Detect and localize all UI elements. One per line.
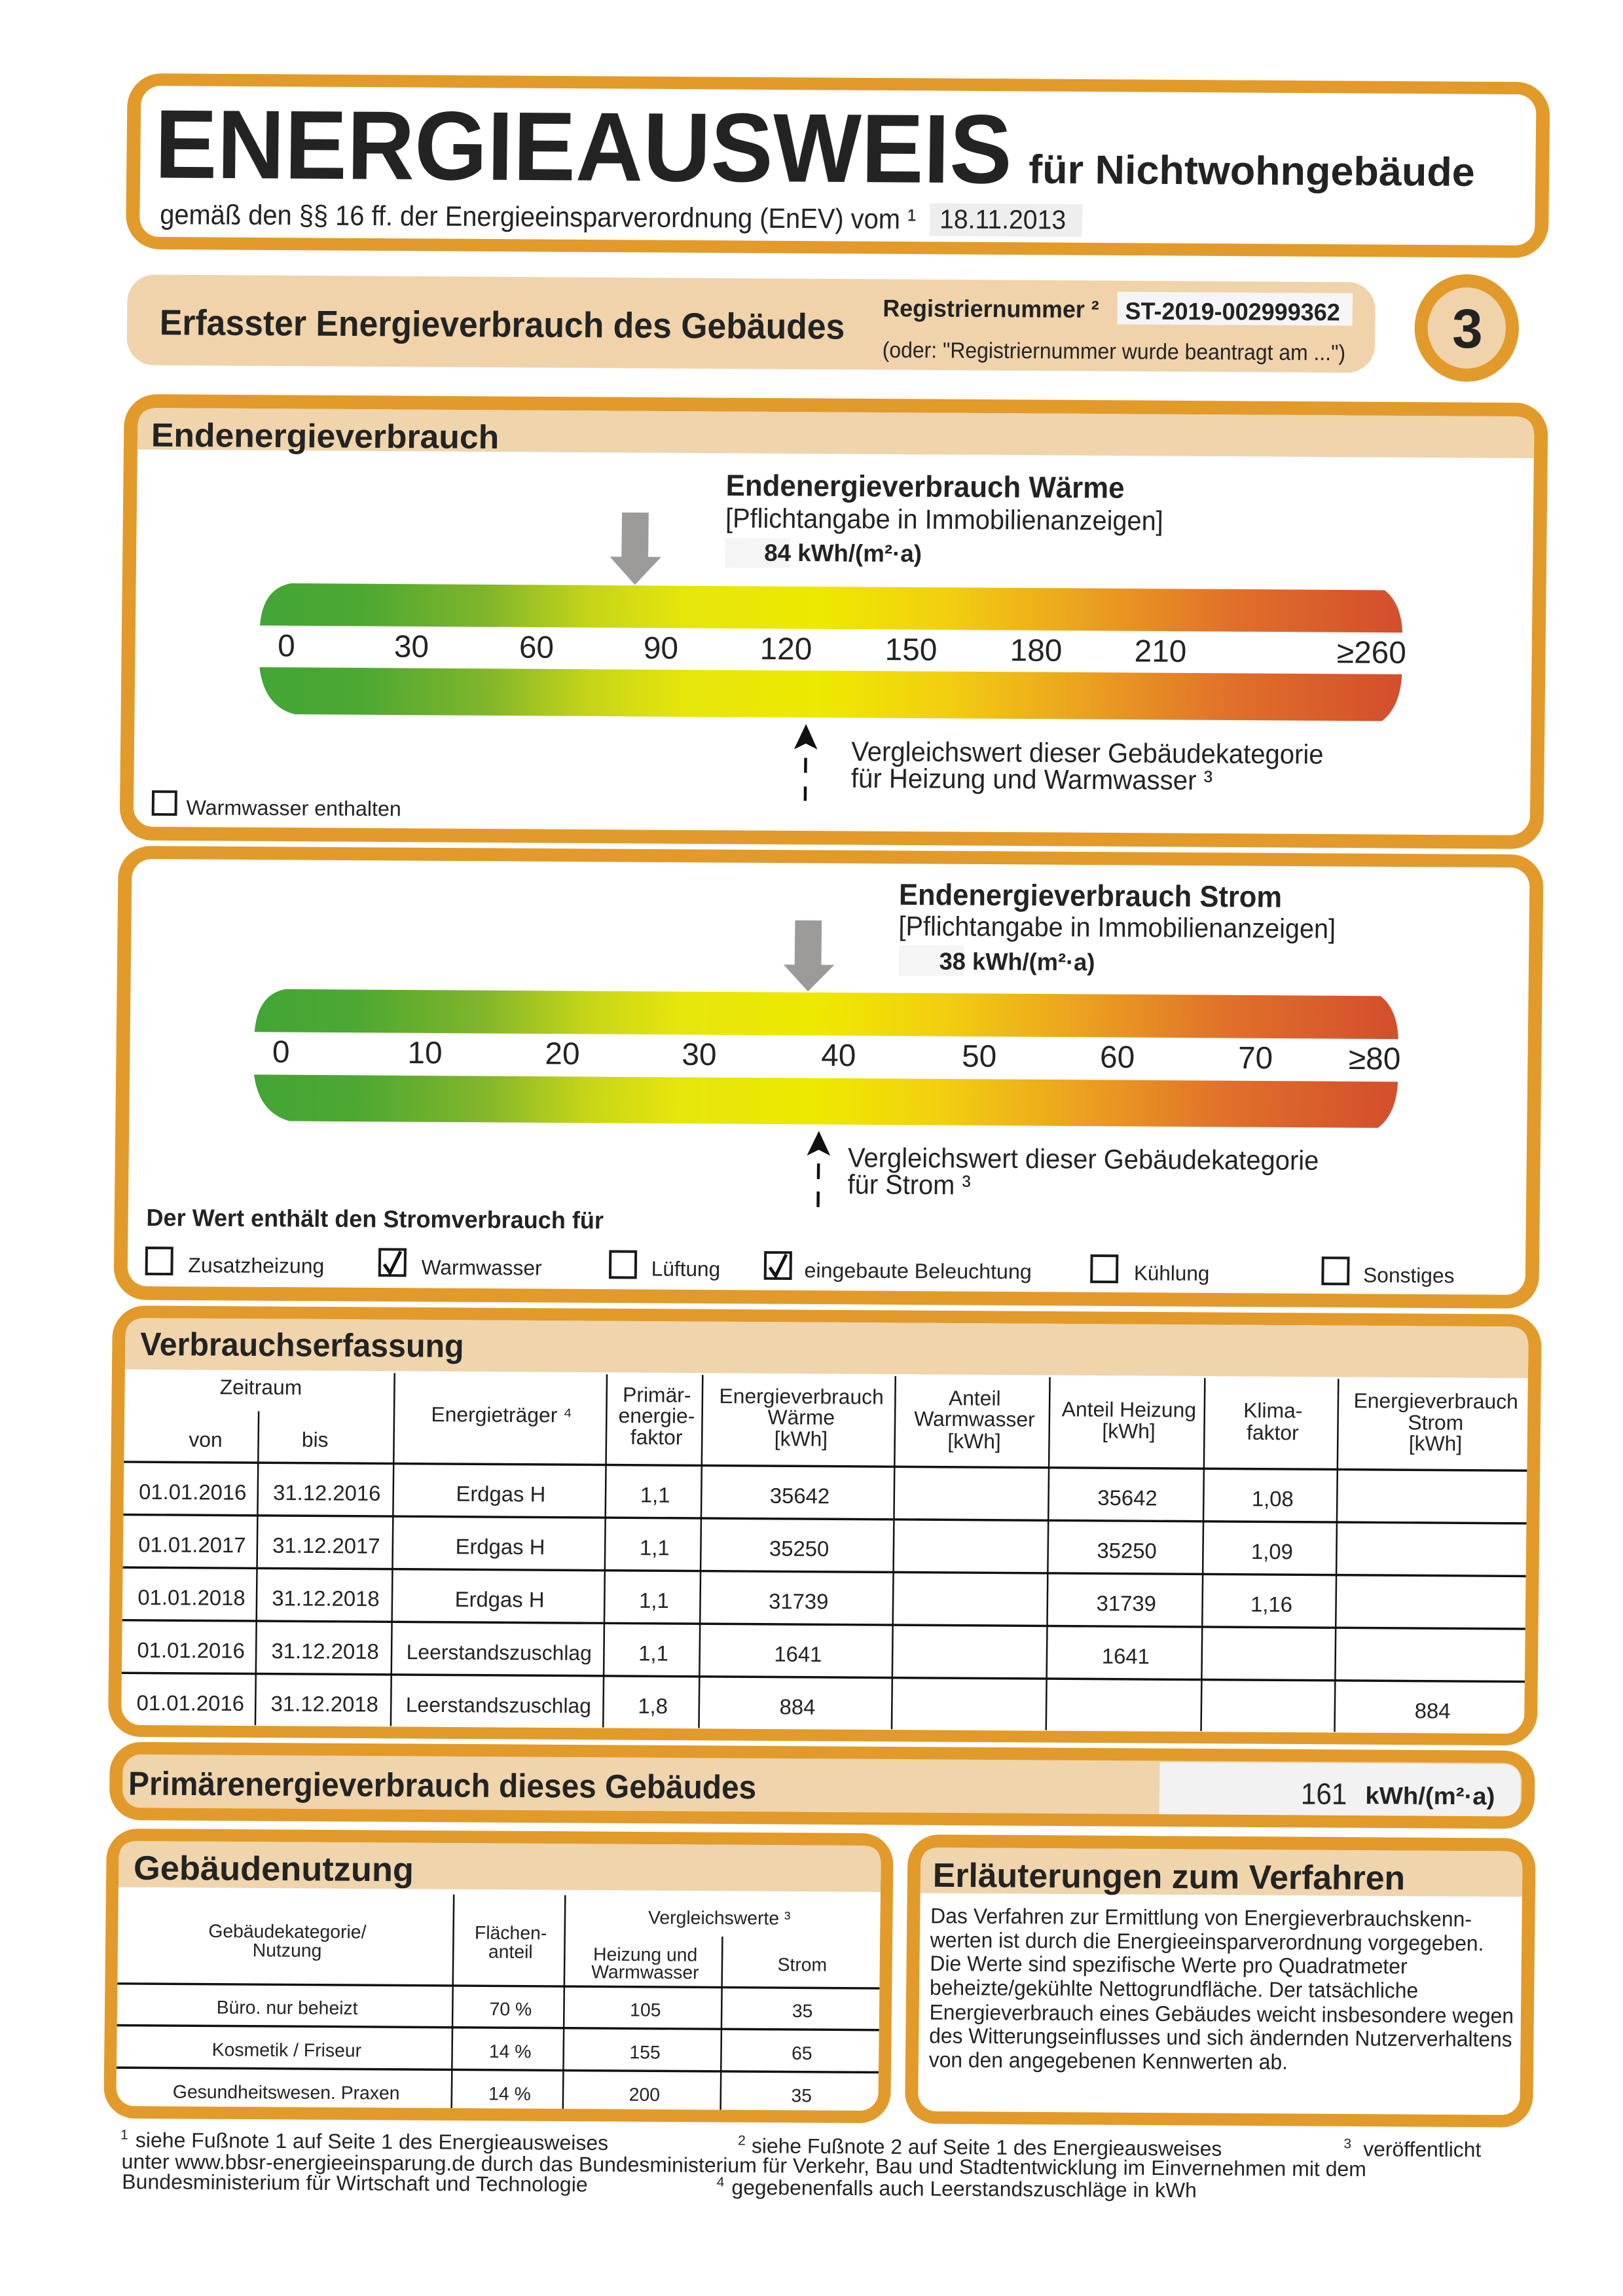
panel: Endenergieverbrauch Wärme [119, 394, 1548, 849]
heading: Gebäudenutzung: Gebäudenutzung [134, 1849, 414, 1888]
row 2017 [138, 1532, 1293, 1563]
explanation paragraph: des Witterungseinflusses und sich ändernden Nutzerverhaltens [929, 2023, 1512, 2051]
explanation paragraph: beheizte/gekühlte Nettogrundfläche. Der tatsächliche [930, 1975, 1418, 2003]
table header: Klima- [1243, 1398, 1303, 1423]
row 2018: 1,1 [639, 1588, 669, 1613]
scale values: 50 [962, 1039, 997, 1074]
table header: [kWh] [947, 1429, 1001, 1453]
row 2017: 35250 [769, 1536, 830, 1561]
scale values: 60 [1100, 1040, 1135, 1075]
table header: Warmwasser [591, 1961, 699, 1983]
arrow: measured value marker [783, 920, 835, 992]
row 2016: 1,08 [1252, 1486, 1294, 1511]
footnotes: siehe Fußnote 1 auf Seite 1 des Energieausweises [136, 2128, 608, 2155]
checkbox: Warmwasser enthalten [153, 792, 176, 814]
registration number field background [1117, 292, 1353, 326]
row Leerstandszuschlag heat [137, 1638, 1150, 1668]
table header: Heizung und [593, 1944, 697, 1966]
scale values: 150 [884, 632, 938, 668]
table header: Energieträger ⁴ [431, 1402, 572, 1427]
row Leerstandszuschlag electricity [136, 1690, 1451, 1723]
panel: section title bar [126, 274, 1376, 373]
row 2016 [139, 1480, 1294, 1511]
value field background [899, 945, 964, 976]
row Gesundheitswesen: 14 % [488, 2083, 531, 2105]
checkbox: eingebaute Beleuchtung (checked) [765, 1252, 1032, 1283]
date field background [930, 204, 1082, 237]
table header: Strom [1408, 1410, 1463, 1434]
date value: 18.11.2013 [939, 204, 1066, 235]
scale values: ≥80 [1349, 1042, 1401, 1076]
row 2017: 01.01.2017 [138, 1532, 246, 1557]
row 2018: Erdgas H [455, 1587, 545, 1612]
scale values [278, 629, 1406, 670]
row 2017: 31.12.2017 [272, 1533, 380, 1558]
table header: Primär- [623, 1383, 691, 1407]
consumption table [121, 1372, 1528, 1733]
panel: Endenergieverbrauch Strom [113, 846, 1544, 1309]
row Gesundheitswesen: Gesundheitswesen. Praxen [173, 2081, 400, 2104]
value field background [1159, 1762, 1521, 1817]
upper colour scale bar [255, 989, 1399, 1039]
table header: Wärme [767, 1405, 835, 1429]
row Leerstandszuschlag heat: 1641 [1102, 1644, 1150, 1668]
row Büro: Büro. nur beheizt [217, 1997, 358, 2019]
checkbox group heading: Der Wert enthält den Stromverbrauch für [146, 1204, 604, 1234]
row 2017: Erdgas H [455, 1534, 545, 1559]
explanation paragraph: Das Verfahren zur Ermittlung von Energieverbrauchskenn- [930, 1903, 1472, 1931]
row 2018: 31739 [769, 1589, 829, 1614]
panel: Erläuterungen zum Verfahren [905, 1834, 1536, 2128]
upper colour scale bar [260, 583, 1403, 632]
row 2018 [137, 1585, 1292, 1616]
scale values: 0 [278, 629, 295, 664]
checkbox: Lüftung: Lüftung [651, 1257, 720, 1281]
scale values [272, 1035, 1401, 1076]
row Leerstandszuschlag heat: 01.01.2016 [137, 1638, 245, 1663]
checkbox: Warmwasser (checked) [380, 1249, 542, 1280]
registration number hint: (oder: "Registriernummer wurde beantragt am ...") [883, 338, 1345, 365]
comparison value caption: Vergleichswert dieser Gebäudekategorie [848, 1142, 1319, 1176]
comparison value caption line two: für Heizung und Warmwasser ³ [851, 763, 1213, 795]
table header: faktor [630, 1425, 683, 1449]
table header: Gebäudekategorie/ [208, 1921, 367, 1943]
panel: Primärenergieverbrauch [109, 1742, 1535, 1829]
scale values: 40 [821, 1038, 856, 1073]
row Leerstandszuschlag electricity: Leerstandszuschlag [406, 1693, 591, 1717]
scale values: 60 [519, 630, 554, 665]
scale values: 90 [644, 631, 678, 666]
footnotes: siehe Fußnote 2 auf Seite 1 des Energieausweises [752, 2134, 1222, 2160]
table header: Strom [777, 1954, 827, 1976]
row Kosmetik: 14 % [489, 2041, 532, 2062]
explanation paragraph: Energieverbrauch eines Gebäudes weicht insbesondere wegen [929, 2000, 1514, 2028]
row Kosmetik: 155 [629, 2042, 661, 2063]
row 2016: Erdgas H [456, 1482, 546, 1506]
scale values: ≥260 [1337, 635, 1406, 670]
row 2017: 1,1 [640, 1535, 670, 1559]
row Leerstandszuschlag heat: 1641 [774, 1642, 822, 1666]
row 2018: 1,16 [1250, 1592, 1292, 1616]
row Büro: 105 [630, 1999, 661, 2021]
heading: Erfasster Energieverbrauch des Gebäudes: Erfasster Energieverbrauch des Gebäudes [159, 302, 845, 347]
row Kosmetik [212, 2039, 812, 2064]
row 2016: 01.01.2016 [139, 1480, 247, 1504]
checkbox: Kühlung: Kühlung [1134, 1261, 1210, 1285]
explanation paragraph: werten ist durch die Energieeinsparverordnung vorgegeben. [930, 1927, 1484, 1956]
arrow: comparison value marker [807, 1131, 831, 1207]
primary energy value: 161 [1301, 1777, 1347, 1811]
footnotes: veröffentlicht [1363, 2137, 1482, 2161]
checkbox: Kühlung [1091, 1256, 1210, 1285]
comparison value caption: Vergleichswert dieser Gebäudekategorie [851, 736, 1324, 770]
mandatory note: [Pflichtangabe in Immobilienanzeigen] [898, 911, 1336, 944]
lower colour scale bar [253, 1074, 1398, 1128]
checkbox: Lüftung [610, 1251, 721, 1281]
footnotes: 2 [738, 2133, 746, 2148]
mandatory note: [Pflichtangabe in Immobilienanzeigen] [725, 503, 1163, 536]
table header: Warmwasser [914, 1407, 1035, 1431]
row Leerstandszuschlag heat: 31.12.2018 [271, 1639, 379, 1664]
explanation paragraph: Die Werte sind spezifische Werte pro Quadratmeter [930, 1951, 1408, 1978]
row Büro: 70 % [489, 1999, 532, 2020]
table header: Nutzung [253, 1940, 322, 1961]
row 2016: 31.12.2016 [273, 1480, 381, 1505]
checkbox label: Warmwasser enthalten [186, 795, 401, 820]
scale values: 20 [545, 1036, 580, 1072]
comparison value caption line two: für Strom ³ [847, 1169, 971, 1200]
row Büro: 35 [792, 2001, 813, 2022]
row Leerstandszuschlag heat: 1,1 [638, 1641, 668, 1666]
table header: Zeitraum [220, 1375, 302, 1399]
footnotes: 1 [120, 2127, 128, 2143]
footnotes: 4 [717, 2175, 724, 2190]
row 2017: 35250 [1097, 1538, 1157, 1563]
row 2018: 31.12.2018 [272, 1586, 380, 1611]
row 2016: 35642 [770, 1484, 830, 1508]
table header [189, 1375, 1518, 1459]
scale values: 120 [759, 632, 812, 666]
row Leerstandszuschlag electricity: 884 [1414, 1698, 1451, 1723]
page number badge [1421, 281, 1512, 375]
table header: Anteil [949, 1386, 1001, 1410]
checkbox: Zusatzheizung [147, 1248, 325, 1278]
scale values: 70 [1238, 1041, 1273, 1076]
table header: Vergleichswerte ³ [648, 1907, 791, 1929]
electricity consumption title: Endenergieverbrauch Strom [899, 878, 1282, 914]
registration number value: ST-2019-002999362 [1125, 297, 1340, 326]
footnotes: 3 [1343, 2136, 1351, 2151]
table header [208, 1904, 828, 1984]
value field background [725, 538, 790, 568]
arrow: comparison value marker [793, 724, 818, 801]
checkbox: Warmwasser (checked): Warmwasser [421, 1255, 542, 1280]
checkbox: Zusatzheizung: Zusatzheizung [188, 1253, 325, 1278]
page number badge: 3 [1452, 298, 1483, 359]
row 2017: 1,09 [1251, 1539, 1293, 1563]
row Kosmetik: Kosmetik / Friseur [212, 2039, 361, 2062]
row Gesundheitswesen: 35 [791, 2085, 812, 2107]
table header: Energieverbrauch [719, 1384, 884, 1409]
table header: Energieverbrauch [1353, 1389, 1518, 1413]
row Leerstandszuschlag electricity: 884 [779, 1694, 816, 1719]
row 2018: 01.01.2018 [137, 1585, 246, 1610]
heat value: 84 kWh/(m²·a) [764, 539, 922, 567]
panel: Verbrauchserfassung [108, 1305, 1542, 1745]
table header: Anteil Heizung [1062, 1397, 1196, 1422]
subtitle: für Nichtwohngebäude: für Nichtwohngebäude [1029, 147, 1475, 195]
footnotes: Bundesministerium für Wirtschaft und Technologie [122, 2170, 588, 2196]
title: ENERGIEAUSWEIS: ENERGIEAUSWEIS [155, 89, 1013, 204]
heat consumption title: Endenergieverbrauch Wärme [725, 469, 1125, 505]
heading: Erläuterungen zum Verfahren: Erläuterungen zum Verfahren [933, 1856, 1405, 1897]
scale values: 30 [394, 629, 429, 665]
row Leerstandszuschlag electricity: 31.12.2018 [270, 1691, 378, 1716]
scale values: 180 [1010, 633, 1063, 668]
arrow: measured value marker [610, 513, 662, 585]
table header: [kWh] [775, 1427, 828, 1451]
checkbox: Sonstiges: Sonstiges [1363, 1263, 1455, 1287]
electricity value: 38 kWh/(m²·a) [939, 948, 1095, 975]
heading: Verbrauchserfassung: Verbrauchserfassung [140, 1326, 464, 1364]
table header: von [189, 1428, 223, 1451]
row Gesundheitswesen [173, 2081, 812, 2107]
row Kosmetik: 65 [792, 2043, 812, 2064]
scale values: 10 [407, 1036, 443, 1070]
primary energy unit: kWh/(m²·a) [1365, 1782, 1495, 1810]
row Leerstandszuschlag electricity: 1,8 [638, 1694, 668, 1718]
table header: bis [302, 1428, 329, 1451]
footnotes: unter www.bbsr-energieeinsparung.de durch das Bundesministerium für Verkehr, Bau und Stadtentwicklung im Einvernehmen mit dem [121, 2149, 1366, 2181]
table header: energie- [618, 1404, 695, 1428]
panel: Gebäudenutzung [103, 1829, 894, 2123]
checkbox: Sonstiges [1322, 1258, 1455, 1287]
registration number label: Registriernummer ² [883, 295, 1099, 323]
scale values: 30 [682, 1038, 717, 1072]
building use table [116, 1893, 881, 2111]
table header: faktor [1247, 1421, 1299, 1444]
explanation paragraph [928, 1903, 1515, 2075]
scale values: 0 [272, 1035, 290, 1070]
row Büro [217, 1997, 813, 2022]
footnotes: gegebenenfalls auch Leerstandszuschläge in kWh [731, 2176, 1197, 2202]
table header: [kWh] [1409, 1431, 1462, 1455]
footnotes [120, 2127, 1482, 2204]
explanation paragraph: von den angegebenen Kennwerten ab. [929, 2047, 1288, 2074]
lower colour scale bar [259, 667, 1402, 721]
heading: Endenergieverbrauch: Endenergieverbrauch [151, 416, 500, 456]
row 2018: 31739 [1096, 1591, 1156, 1616]
checkbox: eingebaute Beleuchtung (checked): eingebaute Beleuchtung [804, 1258, 1032, 1283]
panel: header title box [126, 73, 1550, 258]
row Leerstandszuschlag electricity: 01.01.2016 [136, 1690, 244, 1715]
row Gesundheitswesen: 200 [629, 2085, 660, 2105]
table header: [kWh] [1102, 1419, 1156, 1443]
row Leerstandszuschlag heat: Leerstandszuschlag [407, 1640, 592, 1665]
scale values: 210 [1134, 634, 1187, 669]
row 2016: 35642 [1097, 1485, 1158, 1510]
legal basis line: gemäß den §§ 16 ff. der Energieeinsparverordnung (EnEV) vom ¹ [160, 199, 917, 235]
row 2016: 1,1 [640, 1483, 670, 1507]
table header: Flächen- [475, 1923, 547, 1944]
heading: Primärenergieverbrauch dieses Gebäudes: Primärenergieverbrauch dieses Gebäudes [128, 1764, 757, 1806]
table header: anteil [488, 1942, 533, 1963]
